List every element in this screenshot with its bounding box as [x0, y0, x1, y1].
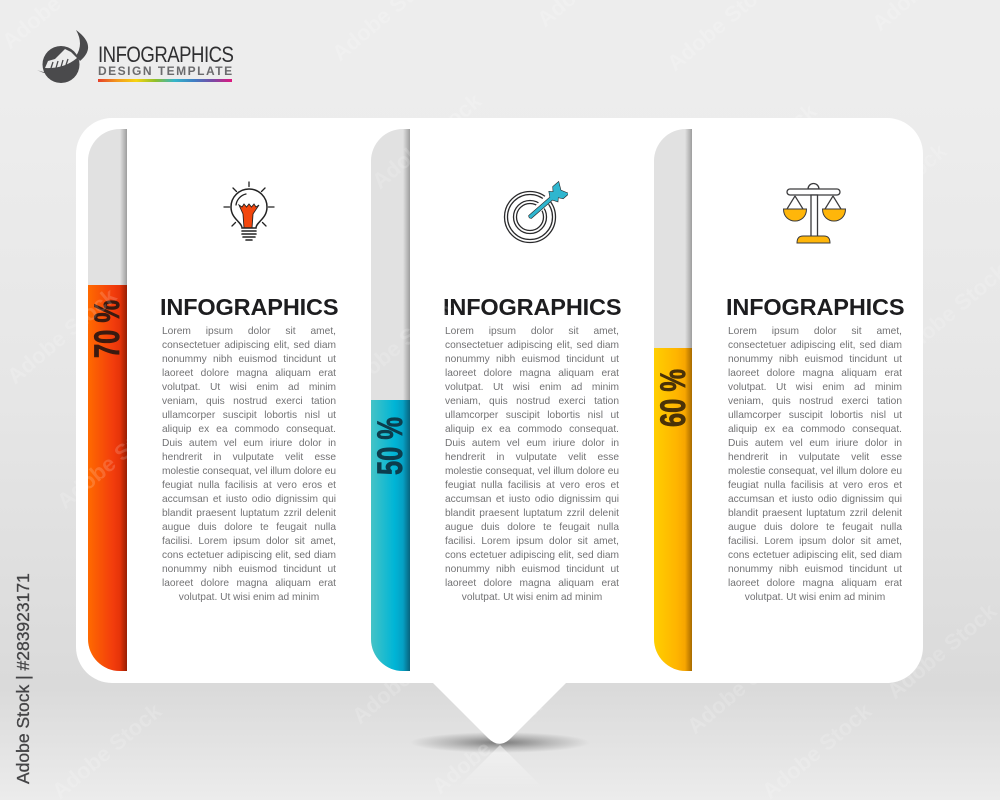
text block 3: Lorem ipsum dolor sit amet,	[728, 326, 902, 336]
text block 1: Lorem ipsum dolor sit amet,	[162, 326, 336, 336]
text block 2: molestie consequat, vel illum dolore eu	[445, 466, 619, 477]
text block 3: Duis autem vel eum iriure dolor in	[728, 438, 902, 449]
text block 2: laoreet dolore magna aliquam erat	[445, 368, 619, 379]
text block 3: cons ectetuer adipiscing elit, sed diam	[728, 550, 902, 561]
progress tab 70%	[88, 129, 127, 671]
text block 1	[162, 326, 336, 603]
text block 2: nonummy nibh euismod tincidunt ut	[445, 564, 619, 575]
panel: column 1	[88, 129, 127, 671]
text block 3	[728, 326, 902, 603]
icon: light bulb	[223, 181, 275, 241]
shadow under pointer	[410, 732, 590, 753]
text block 1: ullamcorper suscipit lobortis nisl ut	[162, 410, 336, 421]
pointer reflection	[486, 745, 514, 760]
text block 3: blandit praesent luptatum zzril delenit	[728, 508, 902, 519]
logo subtitle: DESIGN TEMPLATE	[98, 64, 234, 78]
text block 1: feugiat nulla facilisis at vero eros et	[162, 480, 336, 491]
rainbow rule	[98, 79, 232, 82]
heading 1: INFOGRAPHICS	[160, 294, 338, 320]
text block 3: ullamcorper suscipit lobortis nisl ut	[728, 410, 902, 421]
logo title: INFOGRAPHICS	[98, 42, 233, 67]
text block 1: cons ectetuer adipiscing elit, sed diam	[162, 550, 336, 561]
text block 3: nonummy nibh euismod tincidunt ut	[728, 564, 902, 575]
text block 1: nonummy nibh euismod tincidunt ut	[162, 564, 336, 575]
text block 3: hendrerit in vulputate velit esse	[728, 452, 902, 463]
text block 3: facilisi. Lorem ipsum dolor sit amet,	[728, 536, 902, 547]
watermark layer: Adobe Stock	[702, 98, 822, 204]
text block 3: molestie consequat, vel illum dolore eu	[728, 466, 902, 477]
text block 1: augue duis dolore te feugait nulla	[162, 522, 336, 533]
text block 1: facilisi. Lorem ipsum dolor sit amet,	[162, 536, 336, 547]
text block 2	[445, 326, 620, 603]
stock id side label: Adobe Stock | #283923171	[13, 573, 33, 784]
panel: column 3	[654, 129, 693, 671]
text block 2: volutpat. Ut wisi enim ad minim	[462, 592, 602, 603]
text block 2: augue duis dolore te feugait nulla	[445, 522, 619, 533]
main white card	[76, 118, 923, 683]
text block 1: laoreet dolore magna aliquam erat	[162, 368, 336, 379]
text block 3: veniam, quis nostrud exerci tation	[728, 396, 902, 407]
heading 3: INFOGRAPHICS	[726, 294, 904, 320]
text block 3: volutpat. Ut wisi enim ad minim	[728, 382, 902, 393]
watermark layer: Adobe Stock	[427, 693, 547, 799]
text block 1: hendrerit in vulputate velit esse	[162, 452, 336, 463]
text block 2: feugiat nulla facilisis at vero eros et	[445, 480, 619, 491]
text block 2: blandit praesent luptatum zzril delenit	[445, 508, 619, 519]
text block 3: augue duis dolore te feugait nulla	[728, 522, 902, 533]
text block 3: consectetuer adipiscing elit, sed diam	[728, 340, 902, 351]
watermark layer: Adobe Stock	[52, 408, 172, 514]
text block 2: facilisi. Lorem ipsum dolor sit amet,	[445, 536, 619, 547]
text block 2: hendrerit in vulputate velit esse	[445, 452, 619, 463]
text block 1: molestie consequat, vel illum dolore eu	[162, 466, 336, 477]
text block 1: laoreet dolore magna aliquam erat	[162, 578, 336, 589]
text block 2: laoreet dolore magna aliquam erat	[445, 578, 619, 589]
progress tab 60%	[654, 129, 692, 671]
text block 2: aliquip ex ea commodo consequat.	[445, 424, 619, 435]
text block 2: veniam, quis nostrud exerci tation	[445, 396, 619, 407]
text block 2: volutpat. Ut wisi enim ad minim	[445, 382, 619, 393]
heading 2: INFOGRAPHICS	[443, 294, 621, 320]
text block 1: volutpat. Ut wisi enim ad minim	[179, 592, 319, 603]
watermark layer: Adobe Stock	[347, 623, 467, 729]
text block 3: laoreet dolore magna aliquam erat	[728, 368, 902, 379]
text block 3: aliquip ex ea commodo consequat.	[728, 424, 902, 435]
text block 2: consectetuer adipiscing elit, sed diam	[445, 340, 619, 351]
panel: column 2	[371, 129, 410, 671]
text block 3: volutpat. Ut wisi enim ad minim	[745, 592, 885, 603]
progress tab 50%	[371, 129, 410, 671]
speech-bubble pointer	[433, 683, 566, 744]
watermark layer: Adobe Stock	[2, 283, 122, 389]
icon: target with arrow	[504, 180, 568, 244]
text block 2: cons ectetuer adipiscing elit, sed diam	[445, 550, 619, 561]
icon: balance scales	[783, 182, 846, 244]
watermark layer: Adobe Stock	[337, 293, 457, 399]
logo icon	[38, 30, 88, 83]
text block 1: nonummy nibh euismod tincidunt ut	[162, 354, 336, 365]
watermark layer: Adobe Stock	[832, 138, 952, 244]
logo	[38, 30, 234, 83]
text block 2: accumsan et iusto odio dignissim qui	[445, 494, 619, 505]
text block 1: Duis autem vel eum iriure dolor in	[162, 438, 336, 449]
text block 3: laoreet dolore magna aliquam erat	[728, 578, 902, 589]
watermark layer: Adobe Stock	[367, 88, 487, 194]
text block 3: accumsan et iusto odio dignissim qui	[728, 494, 902, 505]
text block 1: volutpat. Ut wisi enim ad minim	[162, 382, 336, 393]
watermark layer: Adobe Stock	[682, 633, 802, 739]
text block 2: Lorem ipsum dolor sit amet,	[445, 326, 619, 336]
watermark layer: Adobe Stock	[882, 598, 1000, 704]
text block 3: nonummy nibh euismod tincidunt ut	[728, 354, 902, 365]
text block 2: ullamcorper suscipit lobortis nisl ut	[445, 410, 619, 421]
text block 1: blandit praesent luptatum zzril delenit	[162, 508, 336, 519]
text block 2: Duis autem vel eum iriure dolor in	[445, 438, 619, 449]
text block 3: feugiat nulla facilisis at vero eros et	[728, 480, 902, 491]
text block 1: accumsan et iusto odio dignissim qui	[162, 494, 336, 505]
text block 2: nonummy nibh euismod tincidunt ut	[445, 354, 619, 365]
text block 1: aliquip ex ea commodo consequat.	[162, 424, 336, 435]
text block 1: consectetuer adipiscing elit, sed diam	[162, 340, 336, 351]
text block 1: veniam, quis nostrud exerci tation	[162, 396, 336, 407]
